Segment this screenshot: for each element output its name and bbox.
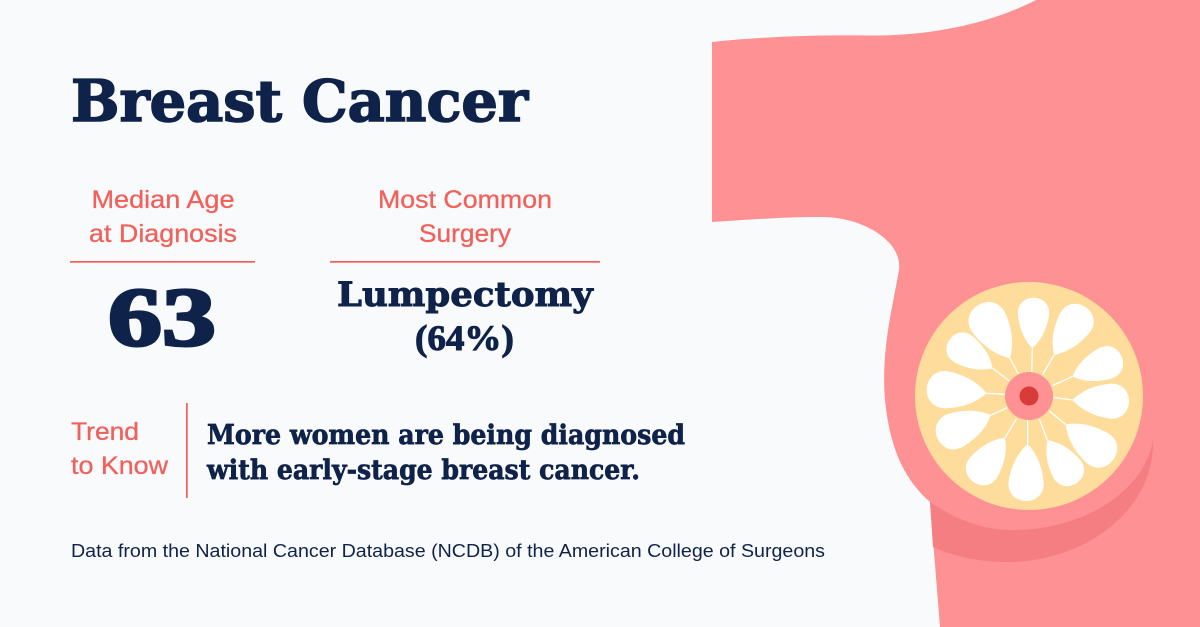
trend statement: with early-stage breast cancer. bbox=[206, 455, 640, 486]
value: lumpectomy 64 percent bbox=[337, 275, 595, 358]
milk lobules and ducts bbox=[925, 295, 1129, 502]
torso silhouette bbox=[712, 0, 1200, 627]
panel: median age bbox=[70, 186, 255, 363]
label: most common surgery: Surgery bbox=[419, 220, 512, 248]
nipple bbox=[1020, 386, 1038, 406]
panel: most common surgery bbox=[330, 186, 600, 358]
rule bbox=[70, 261, 255, 263]
source note: Data from the National Cancer Database (NCDB) of the American College of Surgeons bbox=[71, 541, 825, 561]
value: lumpectomy 64 percent: Lumpectomy bbox=[337, 275, 595, 315]
title: Breast Cancer bbox=[71, 68, 529, 135]
illustration: breast anatomy bbox=[712, 0, 1200, 627]
trend statement: More women are being diagnosed bbox=[207, 420, 685, 451]
label: most common surgery: Most Common bbox=[378, 186, 552, 214]
under-breast shadow bbox=[930, 440, 1153, 562]
ducts bbox=[987, 348, 1072, 444]
label: trend to know: to Know bbox=[71, 452, 169, 480]
gland circle bbox=[915, 282, 1143, 510]
label: most common surgery bbox=[378, 186, 552, 248]
label: trend to know: Trend bbox=[71, 418, 139, 446]
trend statement bbox=[206, 420, 685, 486]
label: median age at diagnosis: Median Age bbox=[92, 186, 234, 214]
panel: trend to know bbox=[71, 403, 685, 498]
vertical divider bbox=[186, 403, 188, 498]
lobules bbox=[925, 295, 1129, 502]
rule bbox=[330, 261, 600, 263]
areola bbox=[1005, 372, 1053, 420]
value: lumpectomy 64 percent: (64%) bbox=[415, 317, 514, 358]
label: median age at diagnosis bbox=[89, 186, 237, 248]
value: 63: 63 bbox=[108, 270, 216, 363]
label: trend to know bbox=[71, 418, 169, 480]
label: median age at diagnosis: at Diagnosis bbox=[89, 220, 237, 248]
